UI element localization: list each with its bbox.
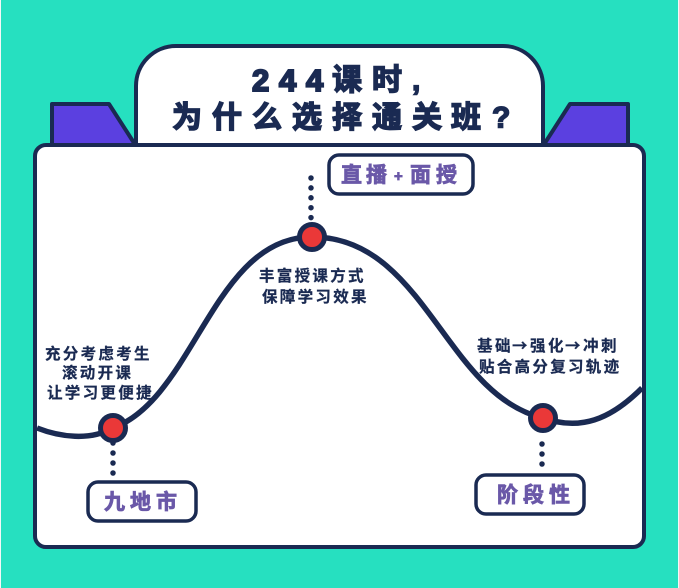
label: 直播+面授 (329, 155, 473, 194)
marker: left (100, 416, 126, 440)
text: left description: 滚动开课 (62, 363, 133, 382)
label: 九地市: 九地市 (104, 490, 182, 514)
marker: peak (300, 224, 324, 250)
title: 244 (252, 63, 324, 98)
label: 直播+面授: + (394, 168, 403, 185)
connector: top (308, 178, 314, 218)
label: 阶段性 (476, 475, 584, 514)
text: right description: 基础→强化→冲刺 (477, 334, 617, 356)
label: 九地市 (88, 482, 196, 521)
text: peak description: 丰富授课方式 (259, 266, 366, 285)
text: right description: 贴合高分复习轨迹 (479, 357, 621, 376)
left purple tab (52, 104, 136, 146)
title panel (136, 46, 543, 146)
title (172, 63, 510, 134)
marker: right (530, 406, 556, 430)
main panel (35, 145, 644, 547)
title: 课时, (332, 64, 420, 97)
connector: right (539, 444, 545, 474)
right purple tab (543, 104, 628, 146)
connector: left (110, 443, 116, 483)
text: left description: 充分考虑考生 (45, 344, 152, 363)
curve (37, 237, 642, 436)
label: 直播+面授: 直播 (341, 164, 387, 187)
text: right description (477, 334, 621, 376)
title: 为什么选择通关班? (172, 102, 510, 134)
text: left description: 让学习更便捷 (47, 383, 154, 402)
label: 直播+面授: 面授 (410, 164, 457, 187)
text: peak description: 保障学习效果 (262, 287, 369, 306)
label: 阶段性: 阶段性 (497, 483, 575, 507)
text: peak description (259, 266, 369, 306)
text: left description (45, 344, 154, 402)
